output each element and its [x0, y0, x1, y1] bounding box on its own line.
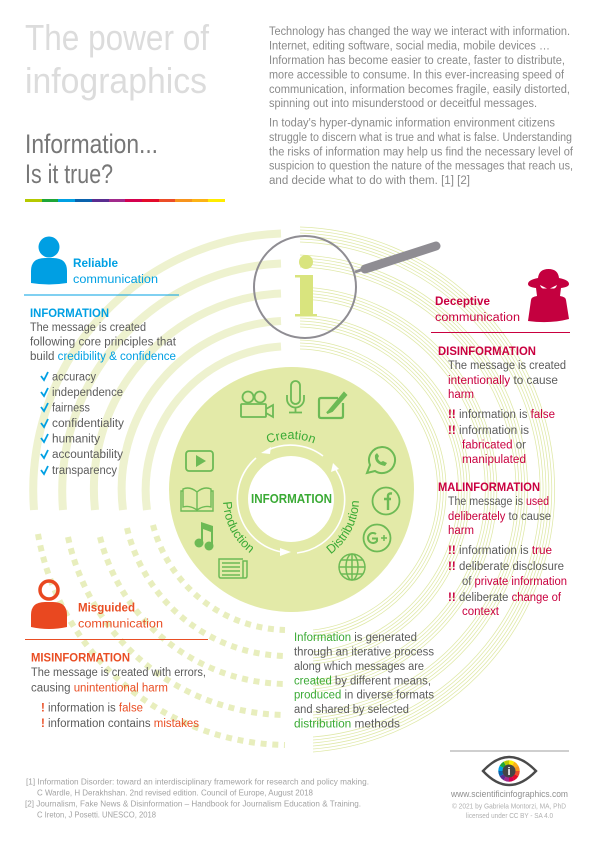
- text: information process: Information is generated: [294, 632, 417, 644]
- text: malinformation: deliberately to cause: [448, 511, 551, 523]
- footnotes: [2] Journalism, Fake News & Disinformation – Handbook for Journalism Education & Training.: [25, 798, 361, 808]
- text: information definition: INFORMATION: [30, 308, 109, 320]
- subtitle: Information...: [25, 129, 158, 159]
- subtitle: [25, 129, 158, 189]
- heading: deceptive: Deceptive: [435, 296, 490, 308]
- text: malinformation: deliberate change of: [459, 592, 562, 604]
- magnifying glass: [254, 236, 436, 338]
- text: malinformation: !!: [448, 561, 456, 573]
- text: information definition: [30, 308, 177, 363]
- text: misinformation: The message is created with errors,: [31, 667, 206, 679]
- text: malinformation: [438, 482, 567, 618]
- text: malinformation: harm: [448, 525, 474, 537]
- icon: open book: [181, 488, 213, 511]
- central disc: [169, 367, 414, 612]
- icon: music note: [194, 522, 214, 550]
- list: core principles: fairness: [52, 402, 90, 414]
- icon: letter i: [295, 255, 317, 316]
- footnotes: C Ireton, J Posetti. UNESCO, 2018: [37, 810, 156, 820]
- text: information process: [294, 632, 434, 730]
- icon: video player: [186, 451, 213, 471]
- icon: eye logo: i: [507, 766, 511, 778]
- text: information process: distribution methods: [294, 718, 400, 730]
- icon: misguided person: [31, 581, 67, 629]
- icon: whatsapp: [367, 447, 395, 473]
- heading: reliable: Reliable: [73, 258, 118, 270]
- icon: google plus: [364, 524, 390, 552]
- text: information definition: The message is created: [30, 322, 146, 334]
- text: disinformation: fabricated or: [462, 440, 526, 452]
- text: disinformation: information is: [459, 425, 529, 437]
- icon: spy: [528, 269, 569, 322]
- panel: misguided communication: [25, 581, 208, 730]
- icon: newspaper: [219, 559, 247, 578]
- central disc: Creation: [266, 430, 315, 444]
- intro text: [269, 26, 574, 187]
- text: malinformation: context: [462, 606, 500, 618]
- intro text: struggle to discern what is true and what is false. Understanding: [269, 132, 572, 144]
- concentric thick rings: reliable quadrant: [33, 234, 281, 510]
- text: information definition: following core principles that: [30, 336, 177, 348]
- text: malinformation: information is true: [459, 545, 552, 557]
- website and licence: licensed under CC BY - SA 4.0: [466, 811, 553, 820]
- list: core principles: transparency: [52, 465, 117, 477]
- heading: misguided: communication: [78, 618, 163, 630]
- text: information process: created by different means,: [294, 675, 431, 687]
- intro text: the risks of information may help us find the necessary level of: [269, 146, 574, 158]
- title: [25, 17, 210, 101]
- icon: globe: [339, 554, 365, 580]
- intro text: and decide what to do with them. [1] [2]: [269, 175, 470, 187]
- concentric dashed rings: misguided quadrant: [38, 525, 285, 745]
- heading: misguided: [78, 602, 163, 630]
- intro text: Internet, editing software, social media, mobile devices …: [269, 40, 550, 52]
- intro text: more accessible to consume. In this ever-increasing speed of: [269, 69, 565, 81]
- subtitle: Is it true?: [25, 159, 113, 189]
- text: disinformation: !!: [448, 425, 456, 437]
- footnotes: C Wardle, H Derakhshan. 2nd revised edition. Council of Europe, August 2018: [37, 788, 313, 798]
- icon: facebook: [372, 488, 400, 514]
- list: core principles: accountability: [52, 449, 123, 461]
- list: core principles: independence: [52, 387, 123, 399]
- text: malinformation: !!: [448, 592, 456, 604]
- central disc: Production: [223, 502, 253, 553]
- text: misinformation: [31, 652, 206, 730]
- heading: deceptive: [435, 296, 520, 324]
- intro text: Technology has changed the way we interact with information.: [269, 26, 570, 38]
- website and licence: [450, 789, 568, 820]
- text: malinformation: of private information: [462, 576, 567, 588]
- curved labels: [231, 439, 351, 499]
- concentric thin rings: deceptive quadrant: [300, 227, 555, 752]
- text: disinformation: harm: [448, 389, 474, 401]
- text: information process: and shared by selected: [294, 704, 409, 716]
- text: malinformation: The message is used: [448, 496, 549, 508]
- text: malinformation: deliberate disclosure: [459, 561, 564, 573]
- list: core principles: accuracy: [52, 372, 96, 384]
- text: misinformation: causing unintentional harm: [31, 682, 168, 694]
- heading: misguided: Misguided: [78, 602, 135, 614]
- website and licence: © 2021 by Gabriela Montorzi, MA, PhD: [452, 802, 566, 810]
- credits: [450, 750, 569, 820]
- footnotes: [25, 776, 369, 820]
- text: disinformation: The message is created: [448, 360, 566, 372]
- text: information process: produced in diverse formats: [294, 690, 434, 702]
- heading: deceptive: communication: [435, 312, 520, 324]
- text: disinformation: intentionally to cause: [448, 375, 558, 387]
- intro text: spinning out into misunderstood or deceitful messages.: [269, 98, 537, 110]
- list: core principles: humanity: [52, 434, 100, 446]
- website and licence: www.scientificinfographics.com: [450, 789, 568, 800]
- text: disinformation: [438, 346, 566, 466]
- text: misinformation: information contains mistakes: [48, 718, 199, 730]
- text: disinformation: DISINFORMATION: [438, 346, 536, 358]
- text: disinformation: information is false: [459, 409, 555, 421]
- footnotes: [1] Information Disorder: toward an interdisciplinary framework for research and policy making.: [26, 776, 369, 786]
- text: misinformation: !: [41, 718, 45, 730]
- cycle arrows: [237, 445, 345, 556]
- text: misinformation: MISINFORMATION: [31, 652, 130, 664]
- icon: edit: [319, 393, 346, 418]
- icon: reliable person: [31, 236, 67, 284]
- intro text: In today's hyper-dynamic information environment citizens: [269, 118, 555, 130]
- text: information process: along which messages are: [294, 661, 424, 673]
- list: core principles: [41, 372, 124, 477]
- text: disinformation: !!: [448, 409, 456, 421]
- central disc: Distribution: [326, 501, 359, 554]
- title: infographics: [25, 60, 207, 101]
- text: disinformation: manipulated: [462, 454, 526, 466]
- rainbow bar: [25, 199, 225, 202]
- intro text: suspicion to question the nature of the messages that reach us,: [269, 161, 573, 173]
- heading: reliable: communication: [73, 274, 158, 286]
- heading: reliable: [73, 258, 158, 286]
- title: The power of: [25, 17, 210, 58]
- text: malinformation: !!: [448, 545, 456, 557]
- text: information process: through an iterative process: [294, 646, 434, 658]
- centre label: INFORMATION: [251, 492, 332, 506]
- text: information definition: build credibility & confidence: [30, 351, 176, 363]
- panel: deceptive communication: [431, 269, 570, 618]
- text: malinformation: MALINFORMATION: [438, 482, 540, 494]
- icon: video camera: [241, 392, 273, 417]
- list: core principles: confidentiality: [52, 418, 124, 430]
- text: misinformation: information is false: [48, 702, 143, 714]
- icon: microphone: [287, 381, 304, 412]
- text: misinformation: !: [41, 702, 45, 714]
- intro text: Information has become easier to create, faster to distribute,: [269, 55, 565, 67]
- intro text: communication, information becomes fragile, easily distorted,: [269, 84, 570, 96]
- panel: reliable communication: [24, 236, 179, 477]
